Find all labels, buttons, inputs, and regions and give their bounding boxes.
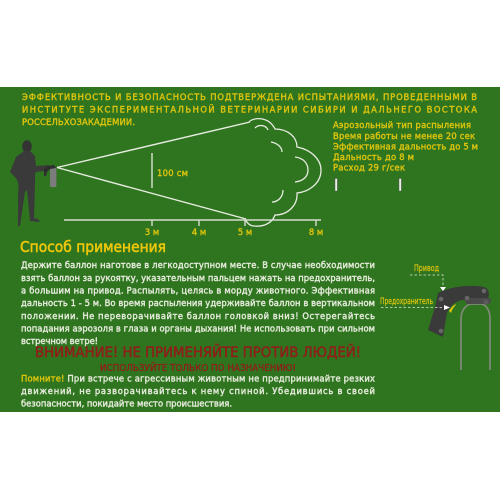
header text: ЭФФЕКТИВНОСТЬ И БЕЗОПАСНОСТЬ ПОДТВЕРЖДЕНА ИСПЫТАНИЯМИ, ПРОВЕДЕННЫМИ В — [22, 92, 477, 102]
spray cone and cloud — [57, 119, 321, 226]
distance scale: 3 м — [145, 227, 159, 237]
callout: safety catch label: Предохранитель — [380, 297, 433, 307]
instructions text block: взять баллон за рукоятку, указательным пальцем нажать на предохранитель, — [21, 273, 375, 283]
icon: person silhouette with spray canister — [10, 140, 56, 226]
specifications list: Эффективная дальность до 5 м — [333, 142, 478, 152]
instructions text block: положении. Не переворачивайте баллон головкой вниз! Остерегайтесь — [21, 311, 375, 321]
green background panel — [0, 87, 500, 412]
header text — [22, 92, 477, 127]
instructions text block: Держите баллон наготове в легкодоступном месте. В случае необходимости — [21, 260, 375, 270]
header text: РОССЕЛЬХОЗАКАДЕМИИ. — [22, 117, 135, 127]
warning subheading: ИСПОЛЬЗУЙТЕ ТОЛЬКО ПО НАЗНАЧЕНИЮ! — [100, 362, 296, 374]
specifications list: Аэрозольный тип распыления — [333, 120, 471, 130]
reminder text block — [21, 374, 375, 408]
reminder text block: Помните! При встрече с агрессивным животным не предпринимайте резких — [21, 374, 375, 384]
reminder text block: безопасности, покидайте место происшествия. — [21, 398, 232, 408]
distance scale: 4 м — [192, 227, 206, 237]
reminder text block: движений, не разворачивайтесь к нему спиной. Убедившись в своей — [21, 386, 375, 396]
heading: usage method: Способ применения — [20, 238, 166, 256]
specifications list: Время работы не менее 20 сек — [333, 131, 475, 141]
instructions text block: попадания аэрозоля в глаза и органы дыхания! Не использовать при сильном — [21, 324, 375, 334]
dimension: 100 cm: 100 см — [157, 168, 188, 178]
header text: ИНСТИТУТЕ ЭКСПЕРИМЕНТАЛЬНОЙ ВЕТЕРИНАРИИ СИБИРИ И ДАЛЬНЕГО ВОСТОКА — [22, 104, 477, 114]
instructions text block: а большим на привод. Распылять, целясь в морду животного. Эффективная — [21, 286, 375, 296]
icon: spray handle and canister — [428, 286, 491, 370]
callout: safety catch label — [380, 297, 450, 310]
distance scale — [64, 220, 323, 237]
dimension: 100 cm — [152, 153, 188, 188]
instructions text block — [21, 260, 375, 346]
callout: drive label — [410, 264, 446, 291]
specifications list — [333, 120, 478, 172]
callout: drive label: Привод — [414, 264, 439, 274]
warning heading: ВНИМАНИЕ! НЕ ПРИМЕНЯЙТЕ ПРОТИВ ЛЮДЕЙ! — [35, 343, 361, 361]
instructions text block: дальность 1 - 5 м. Во время распыления удерживайте баллон в вертикальном — [21, 298, 375, 308]
small white markers — [335, 178, 401, 191]
distance scale: 8 м — [309, 227, 323, 237]
specifications list: Дальность до 8 м — [333, 152, 414, 162]
specifications list: Расход 29 г/сек — [333, 162, 405, 172]
instructions text block: встречном ветре! — [21, 336, 98, 346]
distance scale: 5 м — [238, 227, 252, 237]
